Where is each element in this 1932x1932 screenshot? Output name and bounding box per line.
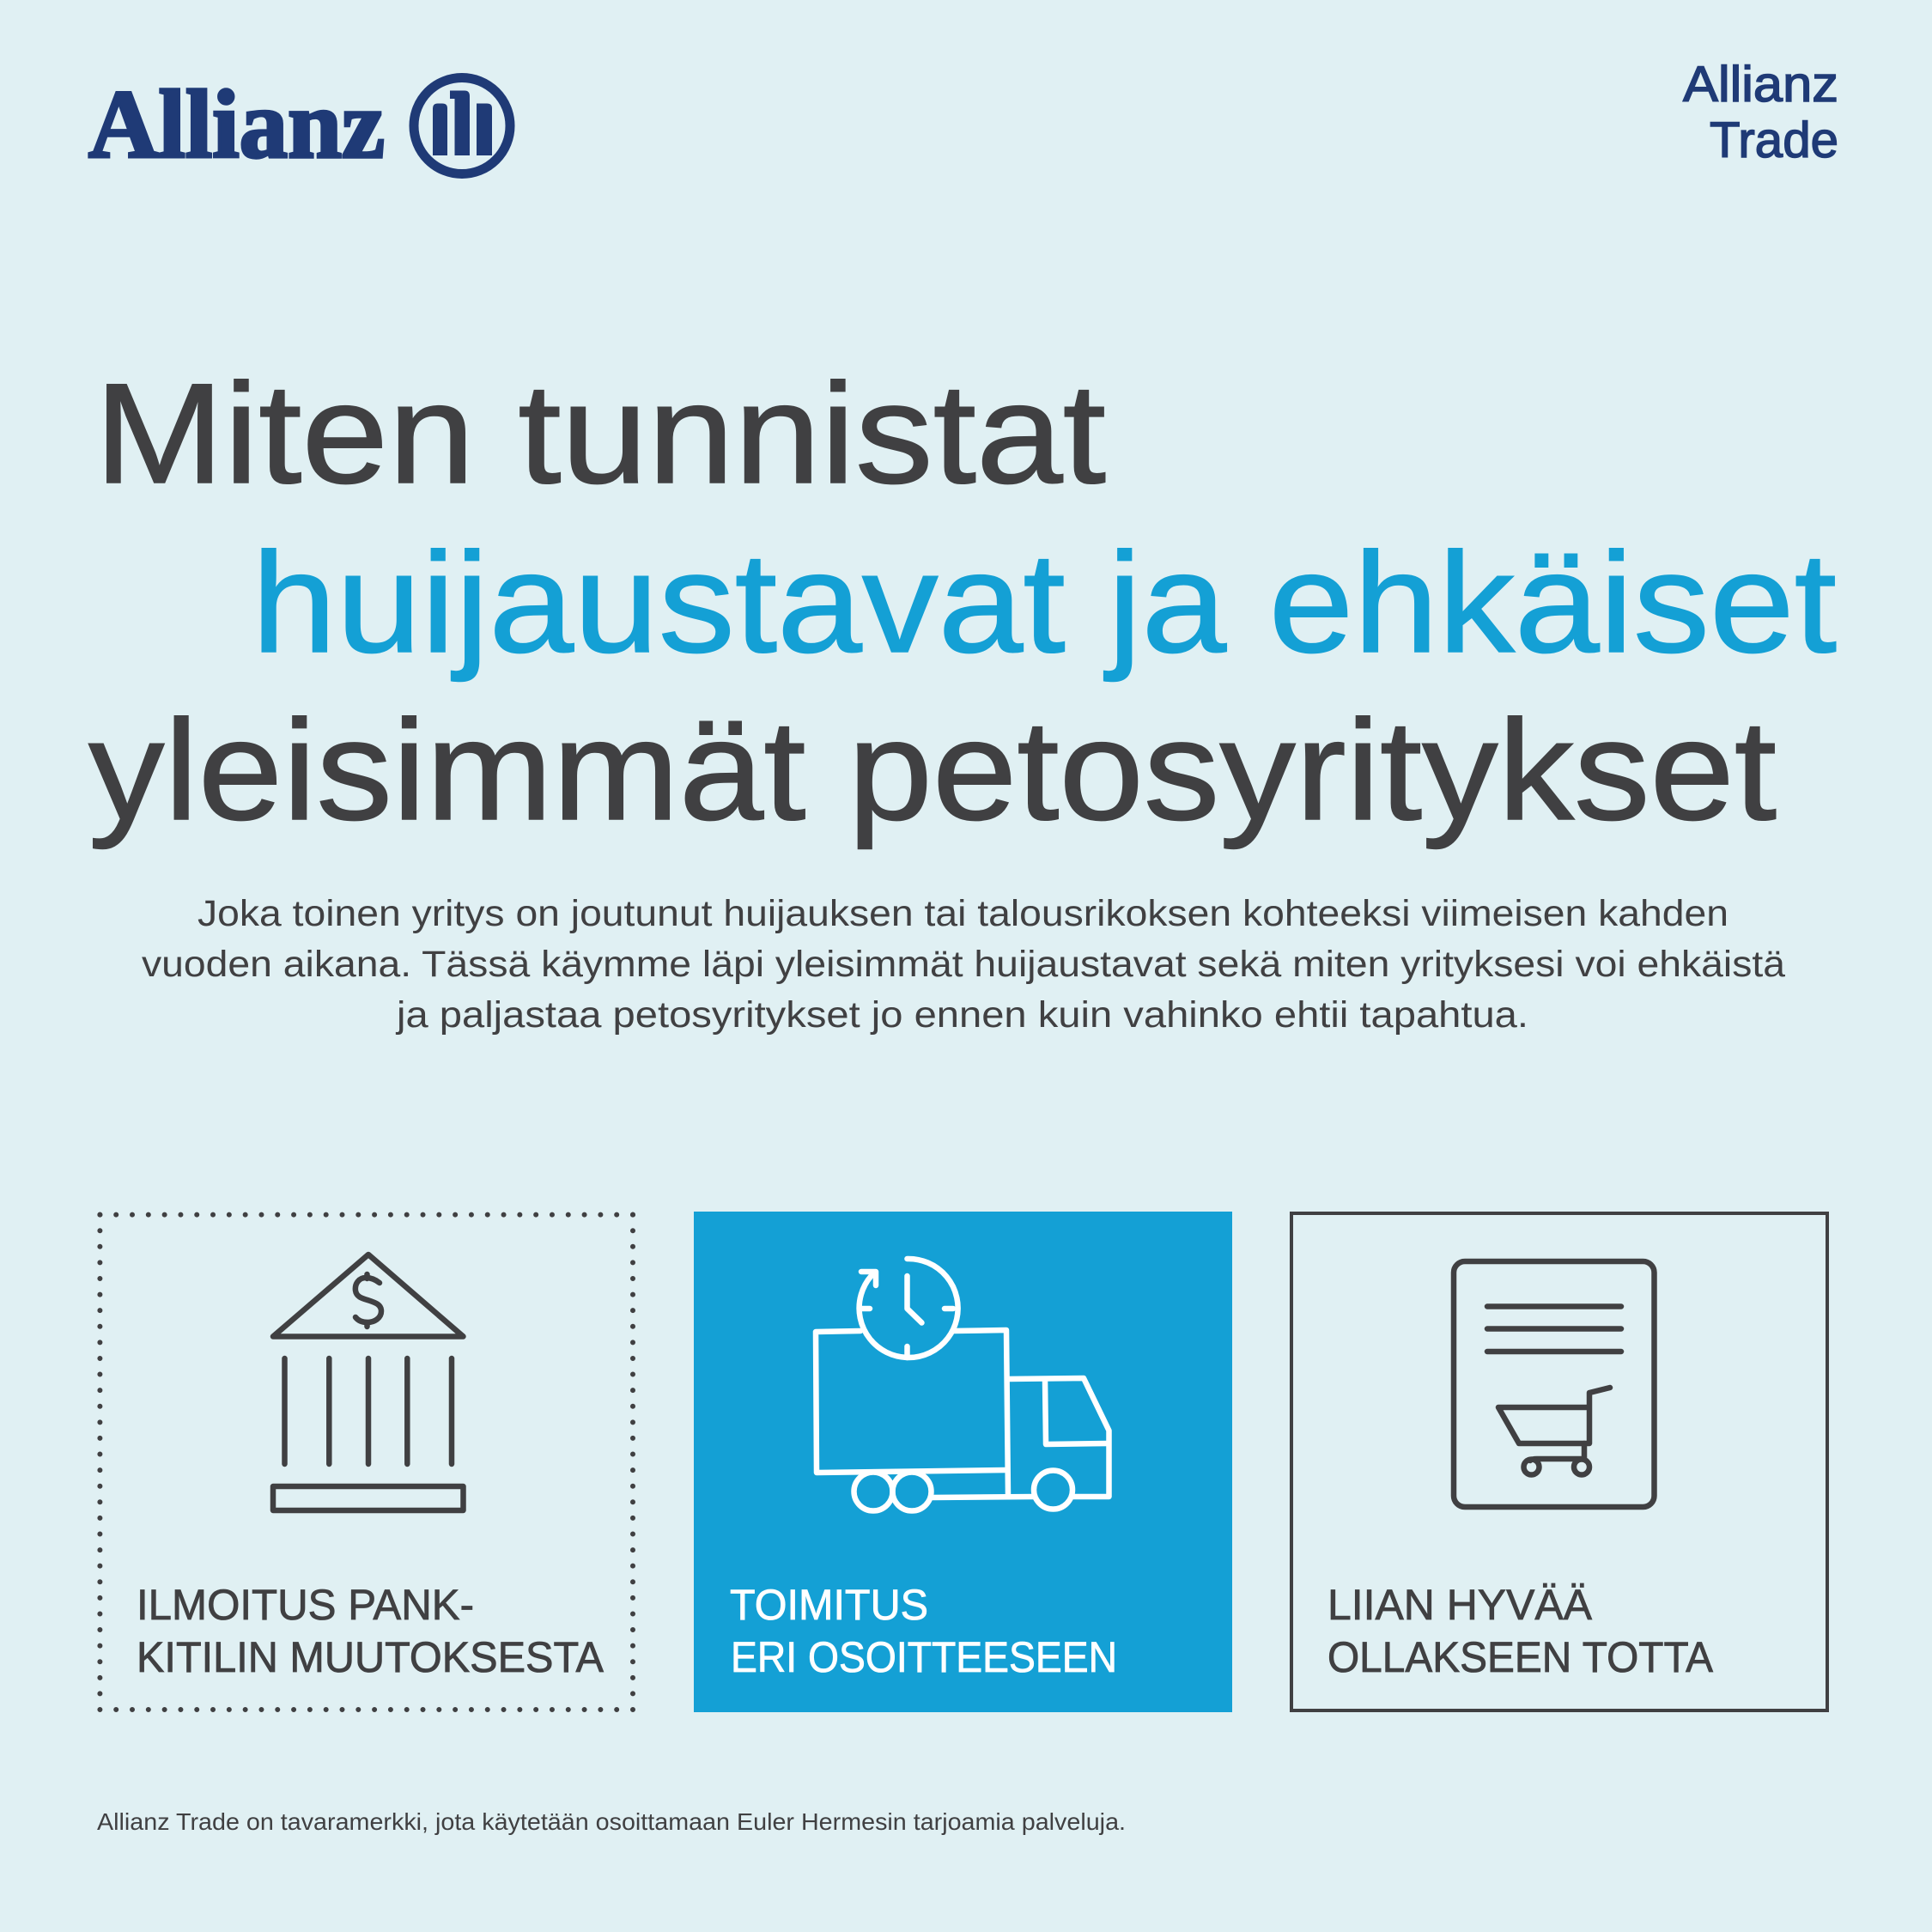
intro paragraph: vuoden aikana. Tässä käymme läpi yleisimmät huijaustavat sekä miten yrityksesi voi ehkäistä — [142, 944, 1785, 985]
title — [88, 355, 1837, 850]
panel label: LIIAN HYVÄÄ — [1327, 1581, 1593, 1629]
panel: too good to be true — [1291, 1213, 1827, 1710]
icon: document with shopping cart — [1454, 1261, 1654, 1507]
intro paragraph — [142, 893, 1785, 1036]
panel: delivery to a different address — [694, 1212, 1232, 1712]
logo emblem — [414, 77, 510, 173]
panel label: TOIMITUS — [730, 1581, 928, 1629]
panel label — [730, 1581, 1117, 1681]
icon: delivery truck with clock — [816, 1259, 1109, 1511]
Allianz logo — [88, 71, 510, 179]
logo wordmark: Allianz — [88, 71, 385, 179]
panel label: KITILIN MUUTOKSESTA — [137, 1633, 605, 1681]
intro paragraph: ja paljastaa petosyritykset jo ennen kuin vahinko ehtii tapahtua. — [395, 994, 1528, 1036]
blue background — [694, 1212, 1232, 1712]
icon: bank building with dollar sign — [273, 1255, 464, 1510]
panel: bank account change notice — [100, 1215, 633, 1710]
panel label — [137, 1581, 605, 1681]
panel label: ILMOITUS PANK- — [137, 1581, 474, 1629]
title: Miten tunnistat — [94, 355, 1106, 513]
solid border — [1291, 1213, 1827, 1710]
dotted border — [100, 1215, 633, 1710]
footnote: Allianz Trade on tavaramerkki, jota käytetään osoittamaan Euler Hermesin tarjoamia palveluja. — [97, 1808, 1126, 1835]
intro paragraph: Joka toinen yritys on joutunut huijauksen tai talousrikoksen kohteeksi viimeisen kahden — [197, 893, 1728, 934]
title: huijaustavat ja ehkäiset — [252, 524, 1837, 683]
title: yleisimmät petosyritykset — [88, 691, 1777, 850]
panel label: ERI OSOITTEESEEN — [731, 1633, 1117, 1681]
brand name: Allianz Trade: Trade — [1710, 112, 1838, 168]
brand name: Allianz Trade: Allianz — [1683, 57, 1838, 112]
panel label: OLLAKSEEN TOTTA — [1327, 1633, 1714, 1681]
panel label — [1327, 1581, 1714, 1681]
brand name: Allianz Trade — [1683, 57, 1838, 168]
